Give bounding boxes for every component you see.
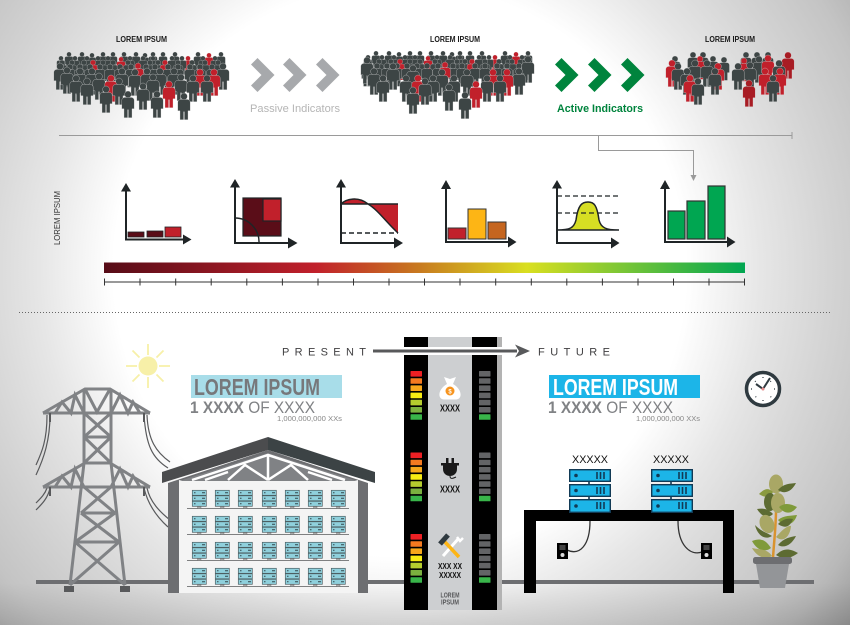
ground line xyxy=(36,580,814,584)
label: server two: XXXXX xyxy=(653,454,690,466)
crowd heading: second group: LOREM IPSUM xyxy=(430,35,480,44)
callout: present xyxy=(190,374,343,423)
tower feet xyxy=(64,586,130,592)
crowd heading: third group: LOREM IPSUM xyxy=(705,35,755,44)
callout: future: 1,000,000,000 XXs xyxy=(636,416,701,423)
chevrons: active xyxy=(555,58,644,92)
table xyxy=(524,510,734,593)
chart 5: bell curve xyxy=(552,180,620,248)
central comparison column xyxy=(404,337,502,610)
chart 6: rising green bars xyxy=(660,180,736,248)
chart 4: mixed bars xyxy=(441,180,516,248)
left level meters xyxy=(410,371,422,583)
callout: present: LOREM IPSUM xyxy=(194,374,320,400)
scale ticks xyxy=(104,278,744,286)
label: tools second line: XXXXX xyxy=(439,570,461,580)
label: active indicators: Active Indicators xyxy=(557,103,643,115)
icon: money bag xyxy=(439,377,461,400)
power cables xyxy=(567,521,702,553)
label: server one: XXXXX xyxy=(572,454,609,466)
icon: transmission tower xyxy=(43,389,150,585)
label: power: XXXX xyxy=(440,484,460,496)
dotted divider xyxy=(19,312,830,314)
outlet right xyxy=(701,543,712,559)
crowd: second group of people xyxy=(361,51,534,119)
chart 1: low bars xyxy=(121,183,192,244)
icon: power plug xyxy=(441,458,459,478)
icon: pylon wires xyxy=(36,415,170,527)
callout: future: 1 XXXX OF XXXX xyxy=(548,398,673,417)
icon: sun xyxy=(126,344,170,388)
timeline rule and connector arrow xyxy=(59,132,792,181)
label: tools: XXX XX xyxy=(438,561,462,571)
icon: hammer and wrench xyxy=(440,535,463,557)
callout: present: 1,000,000,000 XXs xyxy=(277,416,343,423)
label: present: PRESENT xyxy=(282,346,366,358)
gradient scale bar xyxy=(104,262,745,273)
label: column footer: LOREM xyxy=(440,592,460,600)
label: future: FUTURE xyxy=(538,346,610,358)
server stack one xyxy=(570,470,610,512)
icon: money bag: $ xyxy=(448,390,452,396)
warehouse building xyxy=(162,437,375,593)
icon: potted plant xyxy=(752,474,798,588)
crowd heading: first group: LOREM IPSUM xyxy=(116,35,167,44)
warehouse server racks xyxy=(187,490,349,586)
chart 2: nested squares xyxy=(230,179,298,248)
chart 3: declining curve xyxy=(336,179,403,248)
crowd: first group of people xyxy=(54,52,229,120)
callout: future: LOREM IPSUM xyxy=(553,374,678,400)
crowd: third group of people xyxy=(666,52,794,107)
server stack two xyxy=(652,470,692,512)
label: column footer second line: IPSUM xyxy=(441,600,459,606)
arrow: present to future xyxy=(373,344,530,358)
outlet left xyxy=(557,543,568,559)
icon: clock xyxy=(746,372,780,406)
label: passive indicators: Passive Indicators xyxy=(250,103,341,115)
label: money: XXXX xyxy=(440,404,460,414)
chevrons: passive xyxy=(251,58,340,92)
callout: present: 1 XXXX OF XXXX xyxy=(190,398,315,417)
right level meters xyxy=(479,371,490,583)
callout: future xyxy=(548,374,701,423)
rotated axis label: LOREM IPSUM xyxy=(53,191,62,245)
